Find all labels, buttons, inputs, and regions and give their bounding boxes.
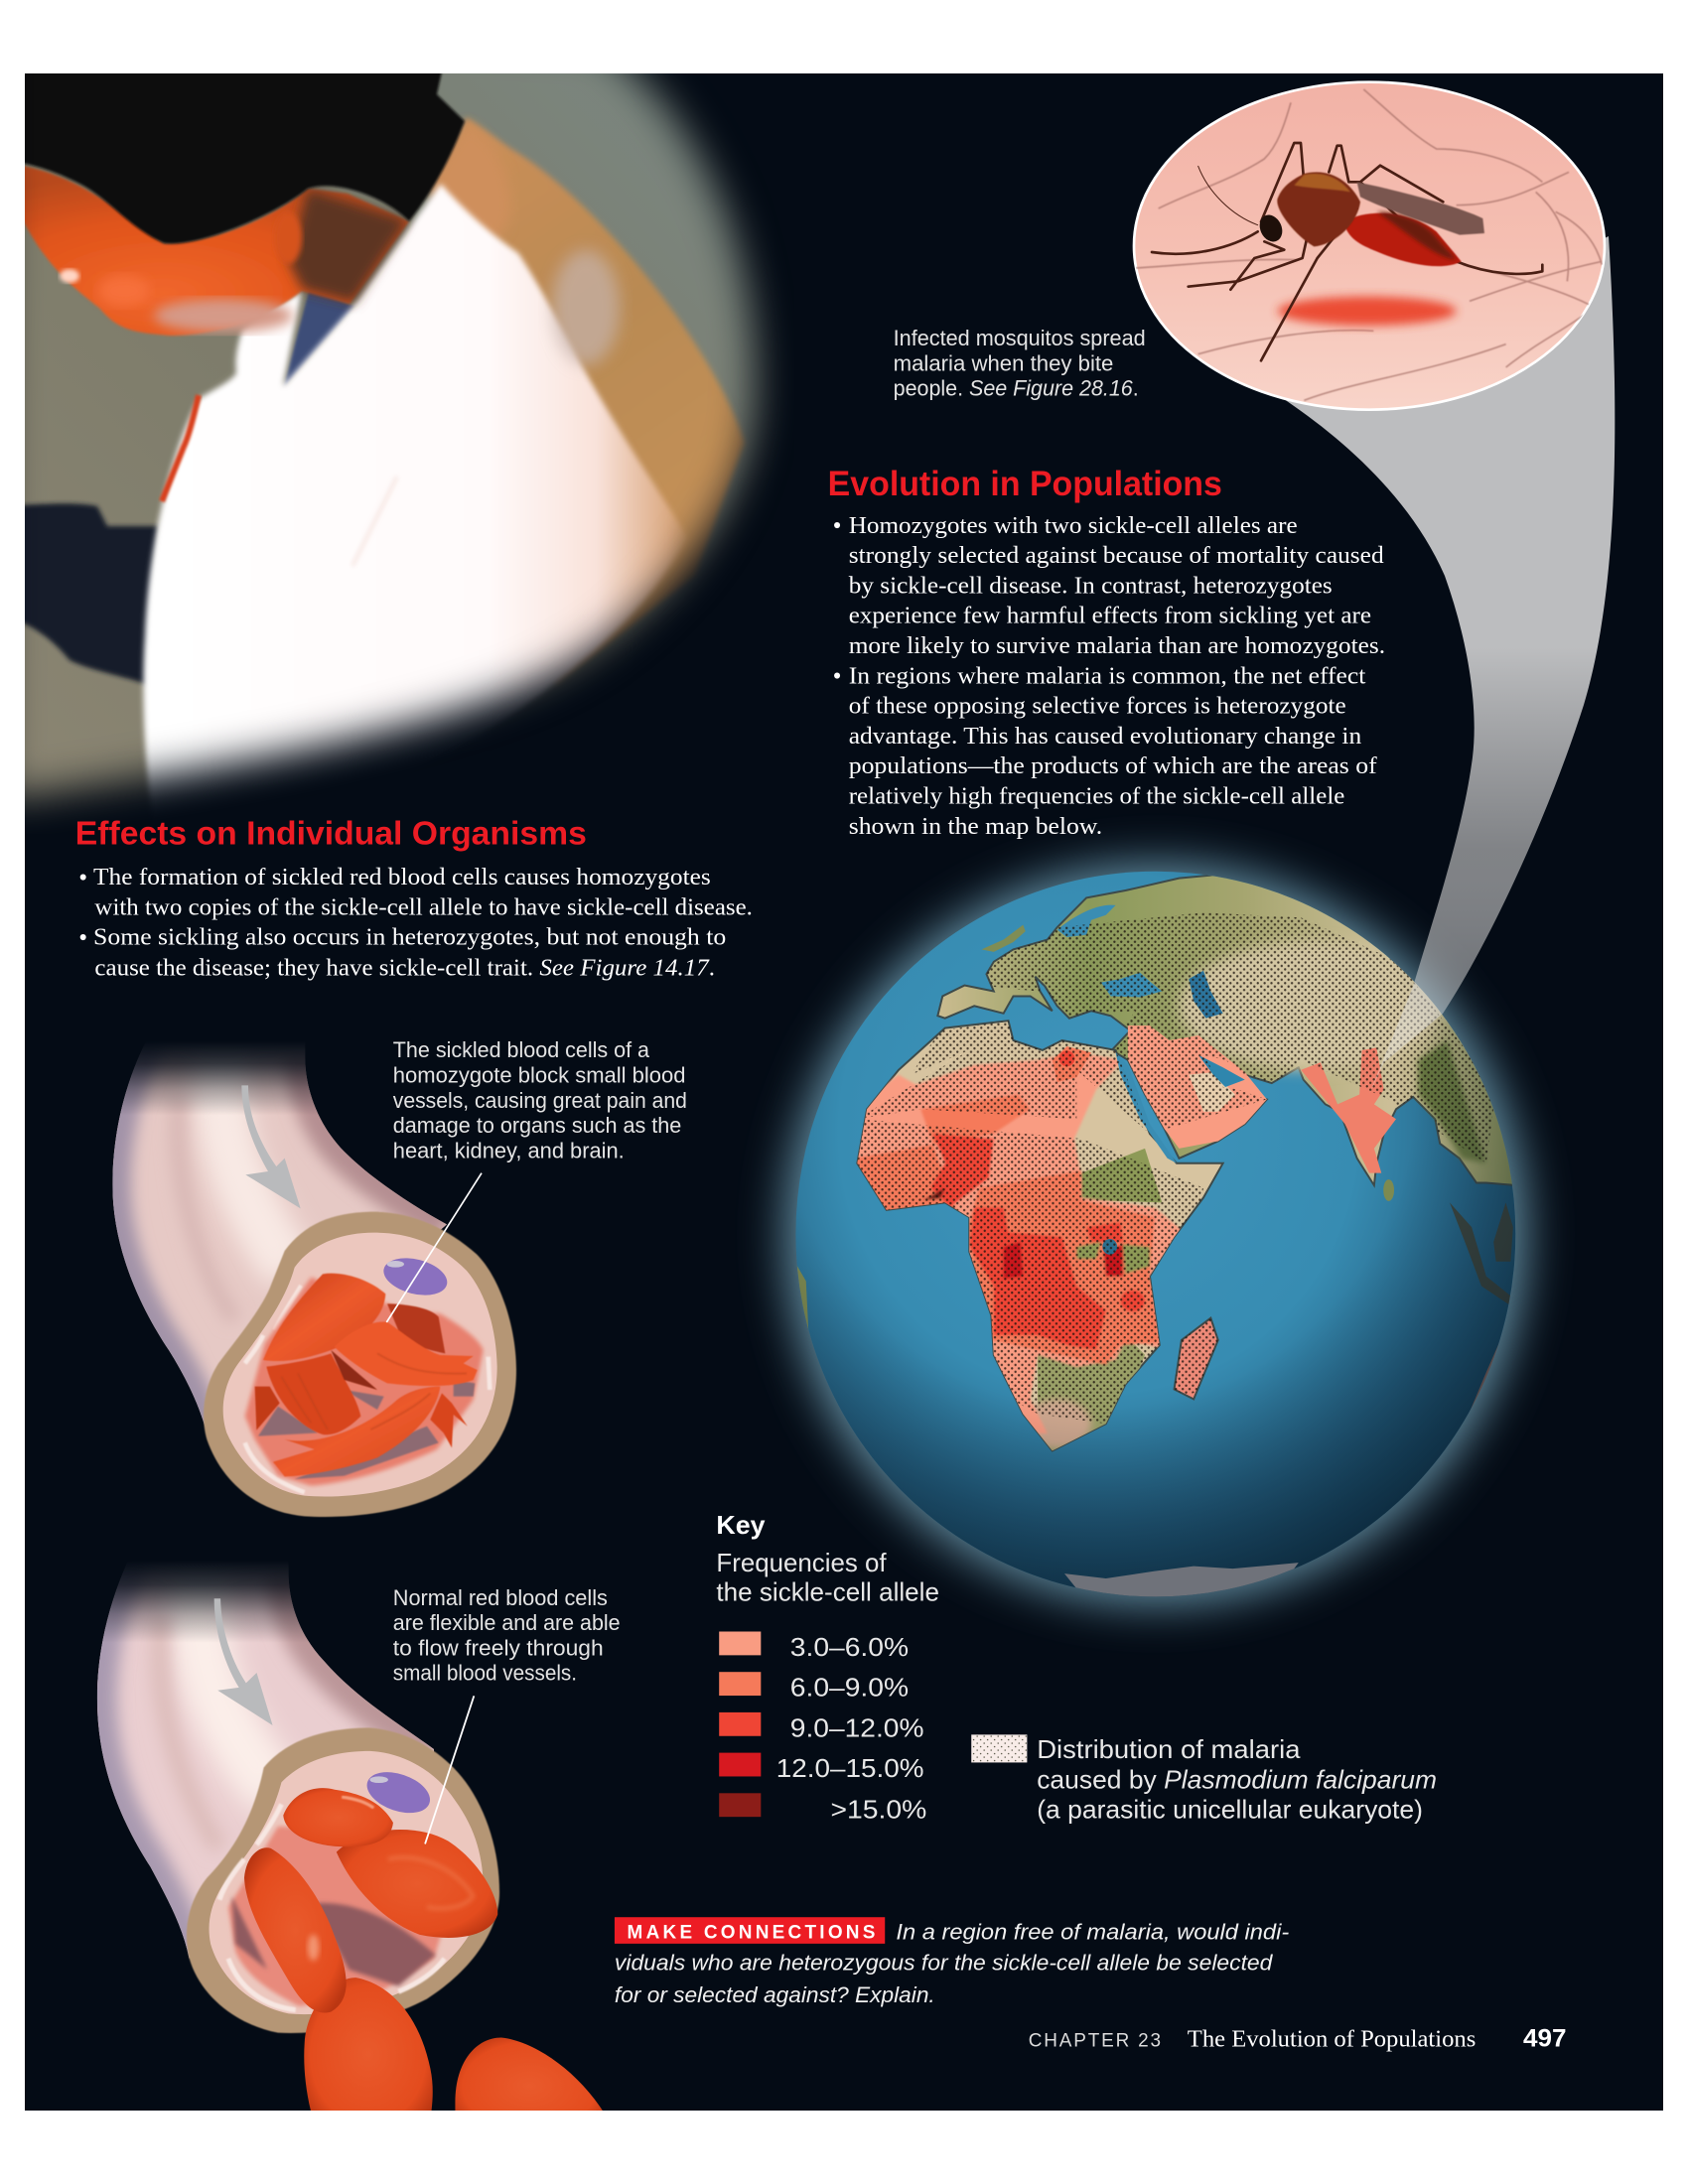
photo coat folds <box>352 477 397 566</box>
South America edge <box>796 1266 808 1330</box>
vessel wall ring <box>187 1728 499 2033</box>
Australia edge <box>1470 1344 1499 1410</box>
lumen shadow <box>232 1896 436 1986</box>
question text: viduals who are heterozygous for the sickle-cell allele be selected <box>615 1951 1273 1976</box>
Southeast Asia forest <box>1418 1040 1486 1163</box>
malaria text: Distribution of malaria <box>1037 1734 1301 1764</box>
swatch 9 to 12 percent <box>719 1712 761 1736</box>
swatch 6 to 9 percent <box>719 1672 761 1696</box>
mosquito wing <box>1357 182 1484 235</box>
text block: population evolution: Homozygotes with two sickle-cell alleles are <box>849 512 1298 539</box>
skin <box>1134 82 1605 410</box>
photo coat shadow <box>552 250 620 365</box>
text block: individual effects: • <box>78 923 87 951</box>
key subtitle: the sickle-cell allele <box>716 1577 939 1607</box>
caption: sickled cells: damage to organs such as the <box>393 1113 681 1138</box>
photo cheek light <box>98 275 150 307</box>
India frequency zone <box>1301 1047 1396 1173</box>
frequency 3 to 6 percent <box>838 1052 1184 1433</box>
photo shirt <box>284 292 353 384</box>
text block: individual effects: cause the disease; they have sickle-cell trait. See Figure 14.17. <box>94 954 715 981</box>
caption: normal cells: are flexible and are able <box>393 1610 621 1635</box>
frequency 9 to 12 percent <box>930 1134 1123 1350</box>
vessel lining <box>210 1751 484 2014</box>
frequency above 15 percent <box>923 1187 945 1200</box>
dark gap <box>331 1350 377 1390</box>
text block: individual effects: with two copies of the sickle-cell allele to have sickle-cell disease. <box>94 893 753 920</box>
white blood cell <box>362 1765 435 1821</box>
text block: population evolution: • <box>833 512 841 540</box>
footer: chapter title and page number: CHAPTER 23 <box>1029 2031 1161 2052</box>
flow arrow <box>241 1085 301 1208</box>
red cell five <box>455 2037 604 2134</box>
text block: population evolution: advantage. This has caused evolutionary change in <box>849 723 1361 750</box>
globe shading <box>795 872 1515 1596</box>
malaria text: (a parasitic unicellular eukaryote) <box>1037 1795 1423 1825</box>
malaria text <box>1037 1734 1437 1825</box>
pointer line <box>386 1173 482 1322</box>
Arabia frequency zone <box>1128 1025 1267 1149</box>
Antarctica <box>1064 1563 1299 1625</box>
flow arrow <box>214 1598 273 1725</box>
text block: population evolution: • <box>833 662 841 690</box>
Indonesia islands <box>1450 1202 1513 1305</box>
swatch above 15 percent <box>719 1793 761 1817</box>
photo face <box>0 164 409 336</box>
red label: MAKE CONNECTIONS <box>628 1922 875 1943</box>
photo highlight <box>60 269 79 283</box>
malaria text: caused by Plasmodium falciparum <box>1037 1764 1437 1794</box>
text block: individual effects <box>78 864 753 981</box>
mosquito caption: malaria when they bite <box>894 350 1113 375</box>
mosquito abdomen <box>1343 213 1462 266</box>
swatch 12 to 15 percent <box>719 1753 761 1776</box>
photo neck <box>288 189 407 303</box>
globe map <box>784 872 1545 1625</box>
photo hair <box>25 73 467 246</box>
text block: individual effects: The formation of sickled red blood cells causes homozygotes <box>93 864 711 890</box>
mosquito thorax <box>1277 172 1360 246</box>
callout beam from mosquito to globe <box>1281 236 1615 1094</box>
Caspian Sea <box>1189 971 1223 1019</box>
photo wall <box>25 73 782 822</box>
key subtitle: Frequencies of <box>716 1548 887 1577</box>
text block: individual effects: Some sickling also occurs in heterozygotes, but not enough to <box>93 924 726 951</box>
text block: population evolution: relatively high frequencies of the sickle-cell allele <box>849 783 1344 810</box>
red cell four <box>304 1978 433 2131</box>
text block: population evolution: shown in the map below. <box>849 813 1102 840</box>
heading: evolution in populations: Evolution in Populations <box>828 465 1222 503</box>
southern Africa and highlands <box>838 1052 1184 1453</box>
caption: normal cells <box>393 1585 621 1686</box>
malaria swatch <box>971 1734 1027 1762</box>
Red Sea <box>1116 1052 1177 1163</box>
key subtitle <box>716 1548 939 1607</box>
red cell back <box>337 1830 497 1938</box>
Lake Victoria <box>1102 1239 1117 1255</box>
Central Asia desert <box>1179 942 1443 1070</box>
caption: normal cells: small blood vessels. <box>393 1661 577 1686</box>
ocean <box>795 872 1515 1596</box>
Persian Gulf <box>1198 1055 1245 1087</box>
vessel lining <box>223 1233 497 1496</box>
label 12 to 15 percent: 12.0–15.0% <box>776 1753 924 1783</box>
mosquito caption <box>894 326 1146 401</box>
vessel tube <box>79 1013 509 1476</box>
legend: key <box>716 1510 939 1825</box>
lining highlights <box>245 1286 490 1492</box>
photo chin <box>154 299 293 333</box>
question text: for or selected against? Explain. <box>615 1982 935 2007</box>
caption: normal cells: to flow freely through <box>393 1635 604 1660</box>
footer: chapter title and page number <box>1029 2025 1567 2053</box>
red cell top <box>283 1788 393 1846</box>
malaria distribution dots <box>838 912 1496 1424</box>
cell stripes <box>281 1353 467 1430</box>
caption: sickled cells: vessels, causing great pain and <box>393 1088 687 1113</box>
label 6 to 9 percent: 6.0–9.0% <box>790 1673 909 1703</box>
text block: population evolution: In regions where malaria is common, the net effect <box>849 662 1366 689</box>
Arabia desert patch <box>1189 1072 1235 1112</box>
sickled cell right <box>335 1321 478 1386</box>
photo coat edge <box>162 395 199 501</box>
Eurasia and Arabia <box>937 874 1545 1187</box>
mosquito legs <box>1152 143 1542 360</box>
lining highlights <box>219 1805 445 2010</box>
caption: sickled cells: heart, kidney, and brain. <box>393 1138 625 1162</box>
footer: chapter title and page number: 497 <box>1523 2025 1567 2053</box>
globe glow <box>786 865 1525 1603</box>
caption: sickled cells: homozygote block small blood <box>393 1063 686 1088</box>
lumen shadow <box>258 1380 475 1479</box>
frequency 12 to 15 percent <box>1004 1242 1123 1279</box>
photo coat <box>143 184 687 824</box>
question text: In a region free of malaria, would indi- <box>896 1920 1289 1945</box>
question text <box>615 1920 1289 2007</box>
mosquito head <box>1255 211 1287 245</box>
sickled cell left spike <box>255 1387 280 1431</box>
Black Sea <box>1101 973 1162 997</box>
sickled cell crescent <box>273 1387 440 1476</box>
vessel: normal cells <box>79 1529 604 2134</box>
sickled cell upper <box>263 1274 385 1361</box>
legend: malaria distribution <box>971 1734 1437 1825</box>
bite mark <box>1278 297 1457 326</box>
photo collar shading <box>427 129 506 232</box>
text block: individual effects: • <box>78 864 87 891</box>
text block: population evolution <box>833 512 1385 840</box>
vessel lumen <box>228 1827 455 2006</box>
caption: sickled cells <box>393 1037 687 1162</box>
text layer <box>75 326 1567 2053</box>
label 9 to 12 percent: 9.0–12.0% <box>790 1712 924 1742</box>
text block: population evolution: by sickle-cell disease. In contrast, heterozygotes <box>849 572 1333 599</box>
text block: population evolution: of these opposing selective forces is heterozygote <box>849 693 1346 720</box>
heading: effects on individual organisms: Effects on Individual Organisms <box>75 816 587 853</box>
frequency 6 to 9 percent <box>852 1094 1160 1365</box>
photo: person in lab coat <box>25 73 782 822</box>
Africa <box>857 1021 1223 1450</box>
mosquito caption: Infected mosquitos spread <box>894 326 1146 350</box>
Libya hotspot <box>1053 1046 1091 1082</box>
mosquito thorax top <box>1294 174 1350 192</box>
sickled cell back <box>387 1303 445 1353</box>
photo ear <box>274 212 302 264</box>
text block: population evolution: experience few harmful effects from sickling yet are <box>849 603 1371 629</box>
sickled cells group <box>255 1274 478 1476</box>
Baltic Sea <box>1057 905 1116 937</box>
vessel lumen <box>245 1278 484 1486</box>
Britain <box>982 925 1026 952</box>
key heading: Key <box>716 1510 766 1540</box>
vessel: sickled cells <box>79 1013 516 1517</box>
text block: population evolution: populations—the products of which are the areas of <box>849 752 1377 779</box>
sickled cell lower <box>266 1353 360 1434</box>
caption: sickled cells: The sickled blood cells of a <box>393 1037 650 1062</box>
text block: population evolution: strongly selected against because of mortality caused <box>849 542 1384 569</box>
label above 15 percent: >15.0% <box>830 1795 926 1825</box>
Madagascar <box>1175 1318 1218 1399</box>
mosquito abdomen dark top <box>1377 211 1457 260</box>
photo shoulder <box>437 117 745 685</box>
mosquito caption: people. See Figure 28.16. <box>894 376 1139 401</box>
Sri Lanka <box>1383 1179 1394 1201</box>
white blood cell <box>379 1252 451 1301</box>
label 3 to 6 percent: 3.0–6.0% <box>790 1632 909 1662</box>
footer: chapter title and page number: The Evolution of Populations <box>1188 2026 1476 2053</box>
hairs <box>1135 89 1602 400</box>
text block: population evolution: more likely to survive malaria than are homozygotes. <box>849 632 1385 659</box>
sickled cell spike right <box>430 1393 468 1447</box>
East Africa green patch <box>1076 1242 1150 1274</box>
mosquito photo <box>1134 82 1605 410</box>
caption: normal cells: Normal red blood cells <box>393 1585 608 1610</box>
callout: make connections <box>615 1917 1289 2007</box>
photo sleeve <box>25 500 159 686</box>
red cell three <box>244 1847 347 2013</box>
vessel wall ring <box>204 1212 516 1517</box>
pointer line <box>425 1696 474 1843</box>
swatch 3 to 6 percent <box>719 1631 761 1655</box>
vessel tube <box>79 1529 540 2043</box>
